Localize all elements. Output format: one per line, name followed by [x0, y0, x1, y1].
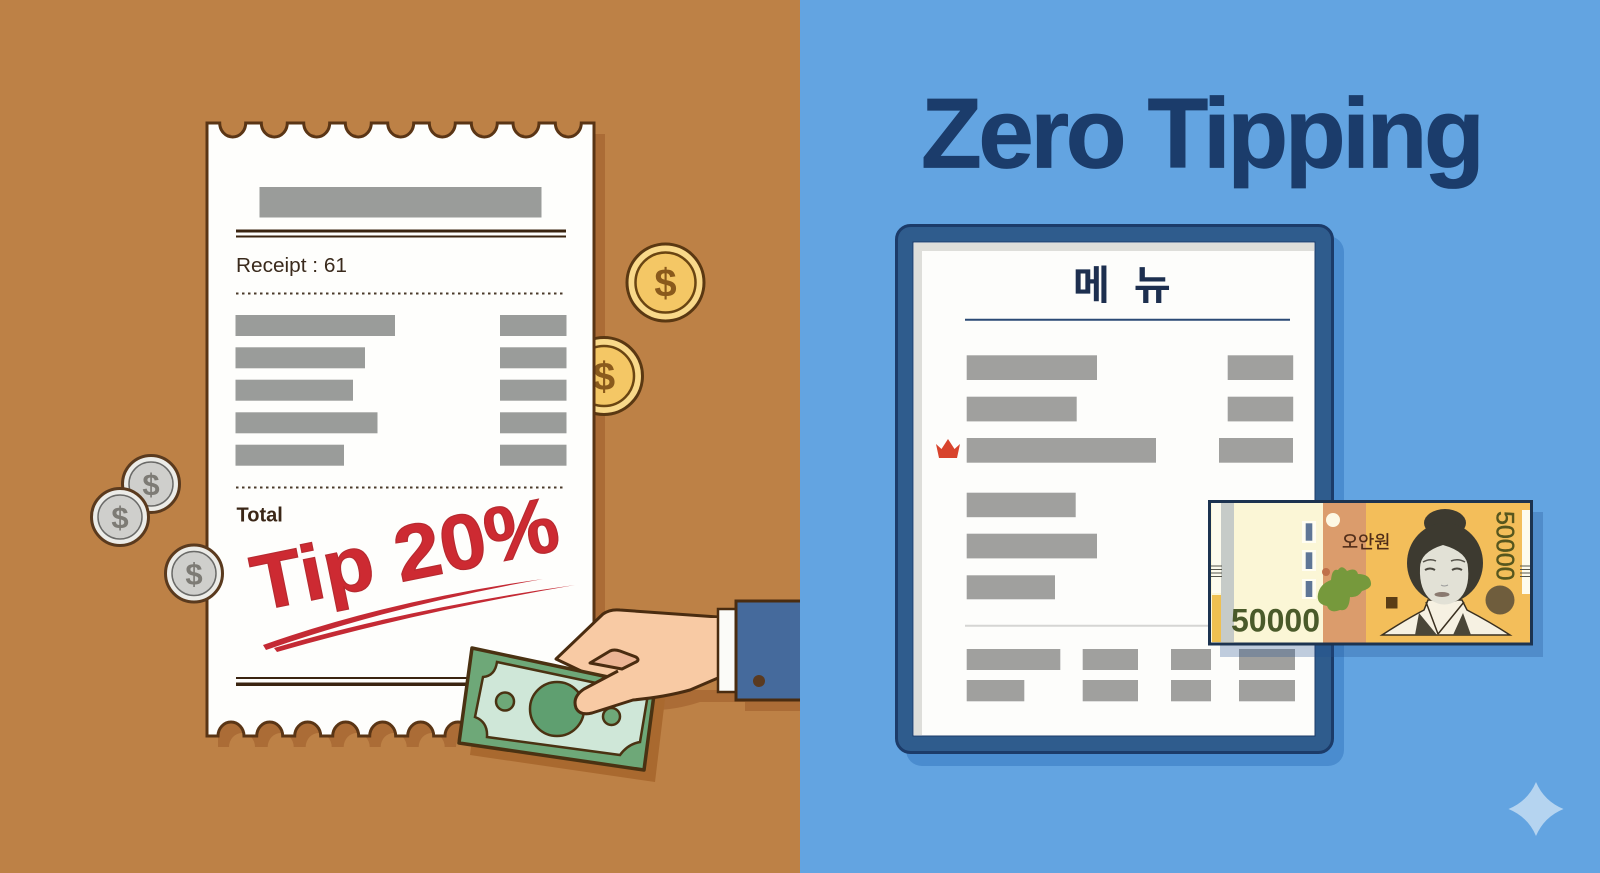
finger fold	[590, 650, 638, 669]
dollar bill	[459, 648, 655, 770]
title: Zero Tipping	[921, 78, 1481, 190]
menu heading: 메 뉴	[1073, 264, 1177, 308]
panel: menu board	[896, 226, 1344, 766]
panel: zero tipping background	[800, 0, 1600, 873]
hand back	[556, 610, 718, 680]
security marks	[1302, 521, 1316, 599]
menu items	[967, 355, 1293, 599]
icon: silver coin front	[92, 488, 148, 546]
jacket sleeve	[736, 601, 800, 700]
icon: silver coin on receipt edge: $	[185, 556, 203, 592]
shirt cuff	[718, 609, 736, 692]
receipt header bar	[260, 187, 542, 218]
icon: silver coin back	[122, 456, 180, 512]
large denomination: 50000	[1231, 602, 1320, 638]
icon: red crown	[936, 439, 960, 458]
receipt line items	[236, 315, 566, 466]
menu paper	[913, 242, 1315, 736]
korean denomination: 오안원	[1342, 532, 1390, 552]
icon: sparkle watermark	[1508, 782, 1564, 836]
banknote shadow	[1220, 512, 1543, 657]
menu footer rows	[967, 649, 1295, 701]
palm and thumb	[575, 618, 718, 714]
note base	[1209, 501, 1532, 644]
leaf	[1318, 567, 1371, 611]
bill shadow	[470, 660, 665, 782]
portrait	[1382, 509, 1510, 635]
receipt paper	[207, 123, 594, 736]
menu board shadow	[906, 236, 1344, 766]
icon: gold coin	[627, 244, 704, 321]
icon: silver coin back: $	[142, 467, 160, 502]
vertical denomination: 50000	[1490, 511, 1518, 581]
icon: gold coin: $	[654, 262, 677, 306]
receipt number: Receipt : 61	[236, 255, 347, 277]
bottom double rule	[236, 677, 476, 679]
icon: silver coin on receipt edge	[166, 545, 222, 602]
icon: 50000 won banknote	[1209, 501, 1543, 657]
icon: gold coin behind receipt	[566, 338, 642, 414]
tip stamp: Tip 20%	[244, 481, 566, 628]
red underline strokes	[263, 579, 575, 652]
sleeve shadow	[590, 690, 800, 711]
panel: receipt	[207, 123, 594, 736]
receipt shadow	[218, 134, 605, 747]
icon: silver coin front: $	[111, 500, 129, 535]
note outline	[1210, 502, 1532, 644]
menu frame	[896, 226, 1332, 752]
panel: tipping culture background	[0, 0, 800, 873]
total label: Total	[236, 504, 283, 526]
icon: gold coin behind receipt: $	[593, 355, 615, 399]
icon: hand holding dollar bill	[459, 601, 800, 782]
